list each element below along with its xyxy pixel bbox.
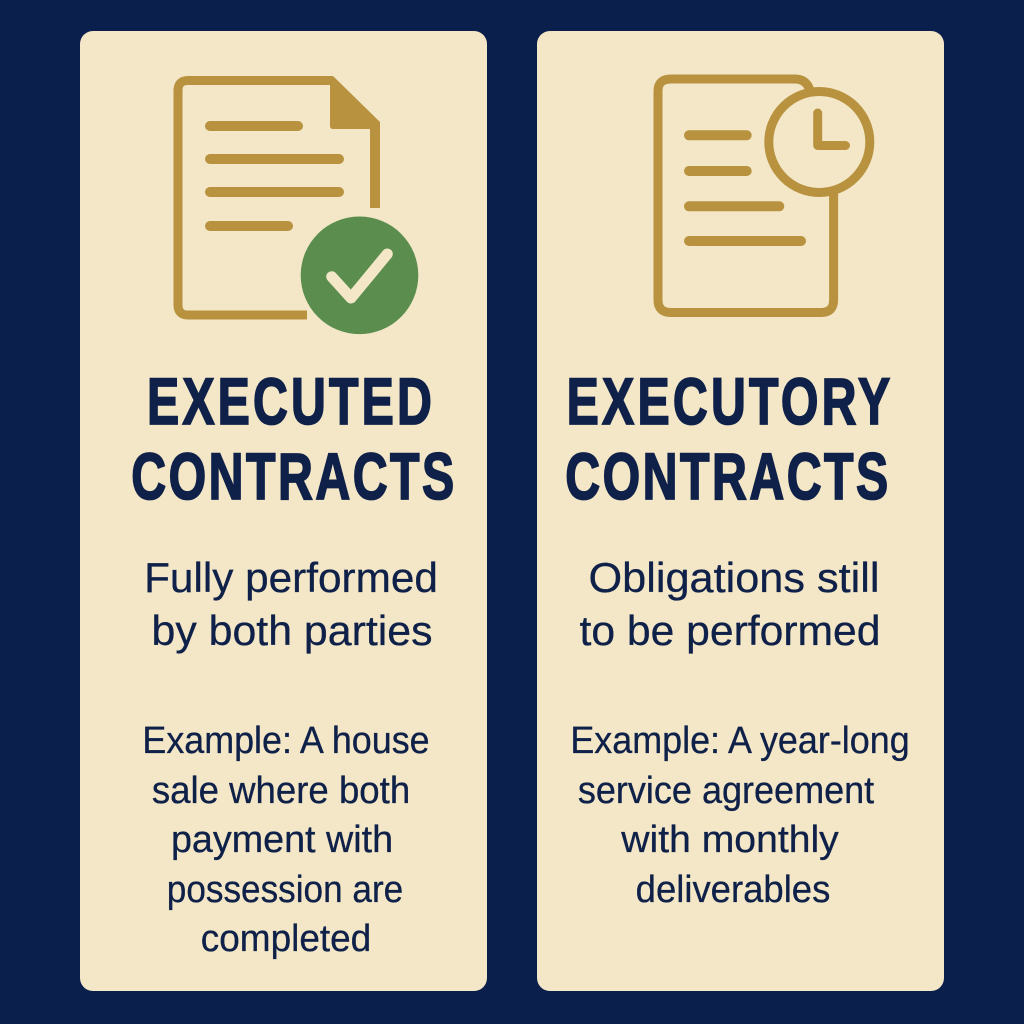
heading: executed contracts	[131, 364, 456, 513]
example: house sale: sale where both	[152, 770, 410, 812]
panel: executory contracts	[537, 31, 944, 991]
example: service agreement	[570, 720, 909, 910]
example: house sale: Example: A house	[142, 720, 429, 762]
example: house sale: payment with	[171, 819, 393, 861]
heading: executory contracts	[565, 364, 893, 513]
example: service agreement: deliverables	[636, 868, 830, 910]
heading: executory contracts: EXECUTORY	[566, 364, 893, 438]
subtitle: obligations: Obligations still	[588, 554, 879, 600]
panel: executed contracts	[80, 31, 487, 991]
example: house sale	[142, 720, 429, 960]
subtitle: fully performed: Fully performed	[144, 554, 438, 600]
heading: executed contracts: EXECUTED	[147, 364, 435, 438]
example: service agreement: with monthly	[621, 819, 838, 861]
subtitle: fully performed	[144, 554, 438, 654]
subtitle: obligations	[579, 554, 880, 654]
icon: document with clock	[654, 74, 874, 317]
icon: document with green check	[174, 76, 418, 334]
example: house sale: completed	[201, 918, 371, 960]
example: house sale: possession are	[167, 868, 403, 910]
subtitle: fully performed: by both parties	[151, 606, 432, 654]
heading: executory contracts: CONTRACTS	[565, 439, 890, 513]
example: service agreement: service agreement	[577, 770, 874, 812]
heading: executed contracts: CONTRACTS	[131, 439, 456, 513]
example: service agreement: Example: A year-long	[570, 720, 909, 762]
subtitle: obligations: to be performed	[579, 606, 880, 654]
